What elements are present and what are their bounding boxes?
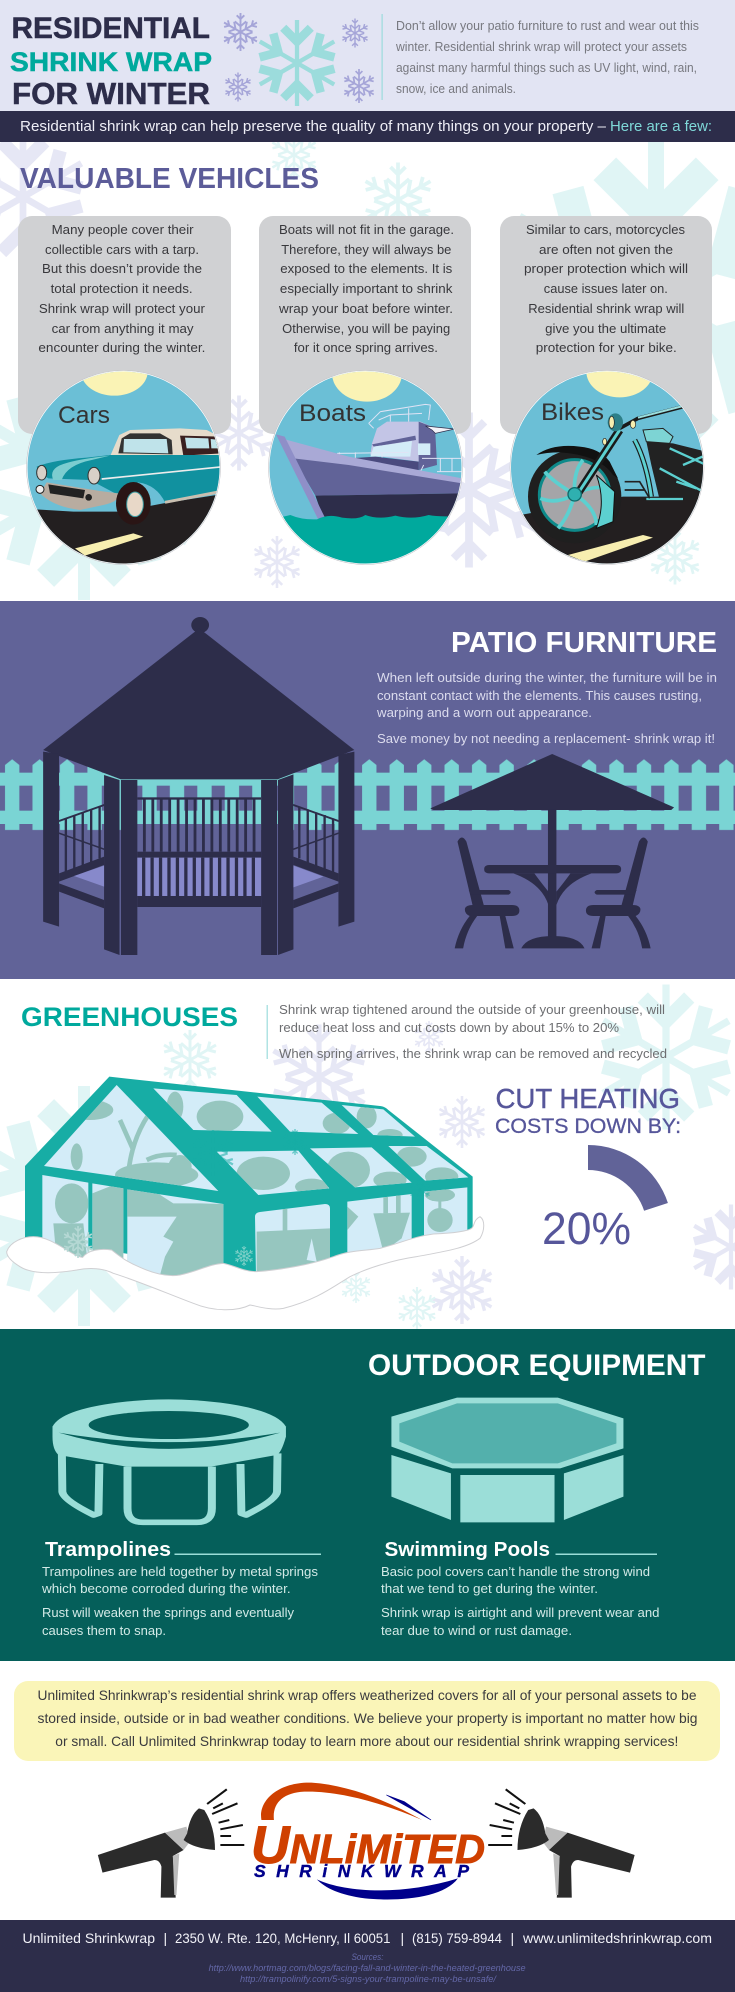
illustration: boat circle (268, 370, 463, 565)
number: 20%: 20% (542, 1203, 631, 1254)
text block: cars: encounter during the winter. (38, 341, 205, 355)
text block: patio: Save money by not needing a replacement- shrink wrap it! (377, 732, 715, 746)
logo (98, 1783, 635, 1899)
text block: patio: warping and a worn out appearance. (376, 706, 592, 720)
text block: boats: Boats will not fit in the garage. (279, 223, 454, 237)
text block: boats: for it once spring arrives. (294, 341, 438, 355)
heading: valuable vehicles: VALUABLE VEHICLES (20, 163, 319, 195)
text block: intro: snow, ice and animals. (396, 81, 516, 96)
sources (209, 1952, 526, 1985)
block: swimming pools: that we tend to get during the winter. (381, 1582, 598, 1596)
stat: cut heating costs (495, 1083, 681, 1254)
text block: intro: against many harmful things such as UV light, wind, rain, (396, 60, 697, 75)
callout: or small. Call Unlimited Shrinkwrap today to learn more about our residential shrink wrapping services! (55, 1733, 678, 1749)
stat: cut heating costs: COSTS DOWN BY: (495, 1115, 681, 1138)
text block: bikes (524, 223, 688, 355)
label: bikes: Bikes (541, 399, 604, 426)
text block: bikes: cause issues later on. (544, 282, 668, 296)
text block: boats: wrap your boat before winter. (278, 302, 453, 316)
illustration: patio table and umbrella (430, 754, 674, 948)
contact line: www.unlimitedshrinkwrap.com (522, 1930, 712, 1946)
text block: bikes: give you the ultimate (545, 322, 666, 336)
text block: cars: collectible cars with a tarp. (45, 243, 199, 257)
contact line: | (164, 1930, 167, 1946)
icon: swimming pool (391, 1398, 623, 1522)
title: RESIDENTIAL (12, 12, 210, 45)
text block: cars (38, 223, 205, 355)
text block: cars: total protection it needs. (51, 282, 193, 296)
text block: bikes: are often not given the (539, 243, 673, 257)
text block: greenhouses: reduce heat loss and cut costs down by about 15% to 20% (279, 1021, 619, 1035)
label: cars: Cars (58, 402, 110, 429)
sources: http://trampolinify.com/5-signs-your-trampoline-may-be-unsafe/ (240, 1974, 497, 1985)
block: swimming pools (381, 1539, 660, 1638)
callout: Unlimited Shrinkwrap’s residential shrink wrap offers weatherized covers for all of your personal assets to be (38, 1687, 697, 1703)
illustration: car circle (26, 370, 221, 565)
block: trampolines: which become corroded during the winter. (41, 1582, 291, 1596)
panel: outdoor equipment (0, 1329, 735, 1661)
icon: heat gun left (98, 1789, 244, 1898)
icon: header snowflakes (221, 13, 376, 106)
title (10, 12, 212, 111)
contact line: 2350 W. Rte. 120, McHenry, Il 60051 (175, 1930, 391, 1946)
contact line: (815) 759-8944 (412, 1930, 502, 1946)
callout (14, 1681, 720, 1761)
panel: patio furniture (0, 601, 735, 979)
contact line: Unlimited Shrinkwrap (22, 1930, 155, 1946)
background snowflakes: greenhouses (0, 984, 735, 1524)
text block: bikes: Similar to cars, motorcycles (526, 223, 685, 237)
banner: Residential shrink wrap can help preserve the quality of many things on your property – (20, 118, 607, 135)
contact line: | (400, 1930, 404, 1946)
text block: boats: Otherwise, you will be paying (282, 322, 450, 336)
logo: SHRiNKWRAP (254, 1861, 469, 1881)
title: FOR WINTER (12, 76, 210, 111)
text block: patio (376, 671, 717, 746)
heading: patio furniture: PATIO FURNITURE (451, 627, 717, 659)
block: swimming pools: Shrink wrap is airtight and will prevent wear and (381, 1606, 660, 1620)
block: trampolines (41, 1539, 321, 1638)
callout: stored inside, outside or in bad weather conditions. We believe your property is important no matter how big (38, 1710, 698, 1726)
illustration: snow drift (7, 1217, 484, 1310)
heading: outdoor equipment: OUTDOOR EQUIPMENT (368, 1349, 706, 1382)
text block: boats: Therefore, they will always be (281, 243, 451, 257)
text block: boats: exposed to the elements. It is (280, 262, 452, 276)
banner (0, 111, 735, 142)
panel: cars card (18, 216, 231, 434)
text block: cars: car from anything it may (52, 322, 194, 336)
text block: cars: But this doesn’t provide the (42, 262, 202, 276)
text block: boats (278, 223, 454, 355)
stat: cut heating costs: CUT HEATING (496, 1083, 680, 1114)
illustration: gazebo (43, 617, 354, 955)
title: SHRINK WRAP (10, 47, 212, 77)
chart: gauge 20 percent (588, 1145, 668, 1211)
icon: trampoline (52, 1399, 286, 1522)
icon: heat gun right (488, 1789, 635, 1898)
panel: boats card (259, 216, 471, 434)
text block: bikes: protection for your bike. (536, 341, 677, 355)
heading: greenhouses: GREENHOUSES (21, 1002, 238, 1032)
block: trampolines: Trampolines (45, 1539, 171, 1561)
footer (0, 1920, 735, 1992)
text block: boats: especially important to shrink (280, 282, 453, 296)
label: boats: Boats (299, 400, 366, 427)
icon: snowflakes on greenhouse (62, 1129, 431, 1266)
text block: greenhouses: Shrink wrap tightened around the outside of your greenhouse, will (279, 1003, 665, 1017)
text block: greenhouses (279, 1003, 667, 1061)
block: swimming pools: tear due to wind or rust damage. (381, 1624, 572, 1638)
sources: http://www.hortmag.com/blogs/facing-fall-and-winter-in-the-heated-greenhouse (209, 1963, 526, 1974)
text block: cars: Many people cover their (52, 223, 194, 237)
text block: bikes: proper protection which will (524, 262, 688, 276)
illustration: motorcycle circle (510, 370, 704, 565)
banner: Here are a few: (610, 118, 712, 135)
text block: bikes: Residential shrink wrap will (528, 302, 684, 316)
text block: cars: Shrink wrap will protect your (39, 302, 205, 316)
logo: UNLiMiTED (251, 1816, 485, 1875)
block: swimming pools: Basic pool covers can’t handle the strong wind (381, 1565, 650, 1579)
contact line: | (510, 1930, 514, 1946)
text block: intro: winter. Residential shrink wrap will protect your assets (395, 39, 687, 54)
text block: intro (395, 18, 699, 96)
background snowflakes: vehicles (0, 142, 735, 600)
sources: Sources: (352, 1952, 384, 1963)
text block: patio: When left outside during the winter, the furniture will be in (377, 671, 717, 685)
block: trampolines: causes them to snap. (42, 1624, 166, 1638)
panel: header (0, 0, 735, 111)
contact line (22, 1930, 712, 1946)
text block: greenhouses: When spring arrives, the shrink wrap can be removed and recycled (279, 1047, 667, 1061)
illustration: greenhouse (7, 1077, 484, 1310)
block: swimming pools: Swimming Pools (384, 1539, 550, 1561)
text block: patio: constant contact with the elements. This causes rusting, (377, 689, 702, 703)
block: trampolines: Rust will weaken the springs and eventually (42, 1606, 295, 1620)
panel: bikes card (500, 216, 712, 434)
fence (0, 757, 735, 832)
block: trampolines: Trampolines are held together by metal springs (42, 1565, 318, 1579)
text block: intro: Don’t allow your patio furniture to rust and wear out this (396, 18, 699, 33)
